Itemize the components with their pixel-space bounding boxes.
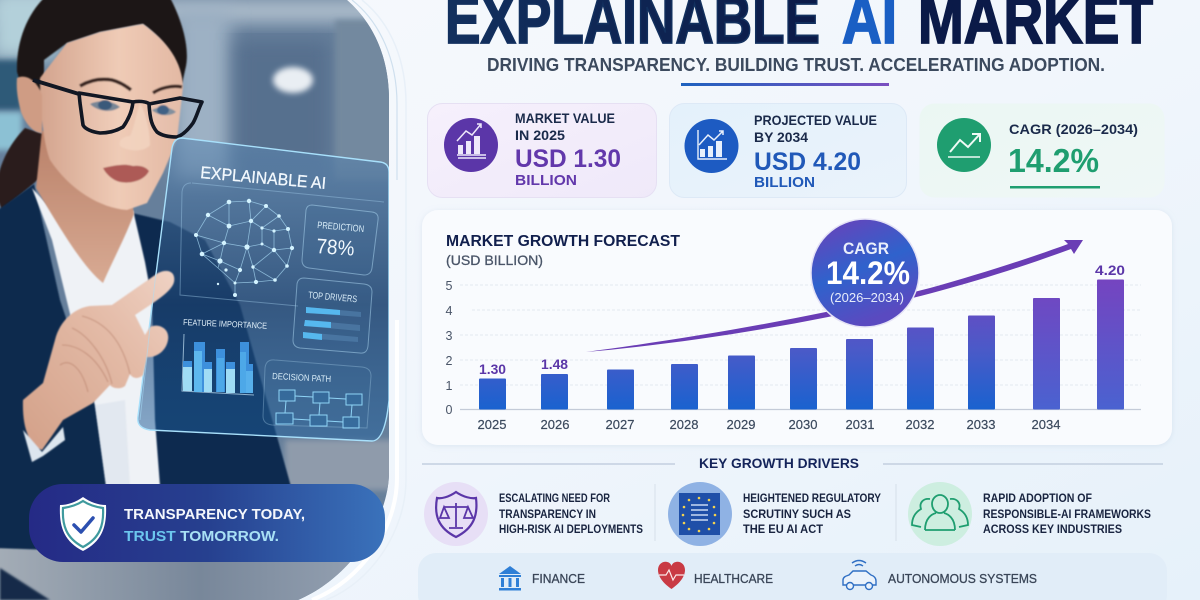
- icon: heart: [658, 562, 685, 589]
- driver: regulation: SCRUTINY SUCH AS: [743, 507, 851, 521]
- icon: blue bar chart: [684, 119, 738, 173]
- icon: EU flag: [668, 482, 732, 546]
- year labels: 2032: [906, 417, 934, 432]
- icon: green trend arrow: [937, 118, 991, 172]
- y axis and grid: 0: [446, 403, 453, 417]
- year labels: 2027: [606, 417, 634, 432]
- chart heading: [446, 233, 680, 268]
- icon: people: [908, 482, 972, 546]
- photo background: [0, 0, 405, 600]
- card: projected value by 2034: BILLION: [754, 174, 815, 191]
- icon: shield: [60, 497, 106, 551]
- icon: bank: [499, 566, 521, 590]
- driver: transparency: ESCALATING NEED FOR: [499, 491, 610, 505]
- top drivers box: TOP DRIVERS: [308, 290, 358, 305]
- panel: photo of woman with holographic dashboard: [0, 0, 406, 600]
- card: CAGR: 14.2%: [1008, 142, 1099, 179]
- card: projected value by 2034: USD 4.20: [754, 148, 861, 176]
- autonomous systems: AUTONOMOUS SYSTEMS: [888, 571, 1037, 586]
- driver: responsible AI: RAPID ADOPTION OF: [983, 491, 1092, 505]
- icon: connected car: [843, 560, 876, 590]
- panel heading: EXPLAINABLE AI: [200, 163, 327, 193]
- year labels: 2028: [670, 417, 698, 432]
- CAGR badge: (2026–2034): [830, 291, 904, 305]
- title: [445, 0, 1153, 58]
- driver: transparency: HIGH-RISK AI DEPLOYMENTS: [499, 522, 643, 536]
- card: CAGR: CAGR (2026–2034): [1009, 121, 1138, 137]
- autonomous systems: [843, 560, 1037, 590]
- growth arrow: [586, 240, 1083, 352]
- finance: [499, 566, 585, 590]
- ponytail: [0, 128, 46, 210]
- y axis and grid: 4: [446, 304, 453, 318]
- year labels: 2030: [789, 417, 817, 432]
- decision path box: DECISION PATH: [272, 371, 331, 384]
- finance: FINANCE: [532, 571, 585, 586]
- decision path box: [263, 360, 371, 428]
- healthcare: [658, 562, 773, 589]
- y axis and grid: [446, 279, 1141, 417]
- value labels: 4.20: [1095, 262, 1125, 278]
- value labels: 1.30: [479, 361, 506, 377]
- panel: market growth forecast chart: [422, 210, 1172, 445]
- glasses: [33, 80, 202, 137]
- y axis and grid: 3: [446, 329, 453, 343]
- tagline banner: [29, 484, 385, 562]
- feature importance chart: [182, 317, 267, 395]
- CAGR badge: 14.2%: [826, 255, 910, 291]
- tagline text: TRUST TOMORROW.: [124, 528, 279, 545]
- driver: responsible AI: ACROSS KEY INDUSTRIES: [983, 522, 1122, 536]
- card: market value in 2025: [428, 104, 656, 198]
- top drivers box: [293, 278, 372, 353]
- suit jacket: [0, 184, 292, 552]
- section: key growth drivers: KEY GROWTH DRIVERS: [699, 455, 859, 471]
- card: market value in 2025: USD 1.30: [515, 145, 621, 173]
- subtitle: DRIVING TRANSPARENCY. BUILDING TRUST. ACCELERATING ADOPTION.: [487, 55, 1105, 75]
- brain network: [194, 199, 294, 297]
- card: market value in 2025: IN 2025: [515, 127, 565, 143]
- year labels: 2026: [541, 417, 569, 432]
- section: key growth drivers: [422, 455, 1163, 546]
- card: projected value by 2034: [670, 104, 906, 198]
- hair: [16, 0, 188, 91]
- tagline text: [124, 506, 305, 545]
- neck: [36, 130, 134, 283]
- feature importance chart: FEATURE IMPORTANCE: [183, 317, 267, 331]
- CAGR badge: CAGR: [843, 239, 889, 258]
- driver: regulation: HEIGHTENED REGULATORY: [743, 491, 881, 505]
- prediction box: 78%: [316, 235, 355, 261]
- panel: industries strip: [418, 553, 1167, 600]
- hologram edge over hand: [140, 272, 156, 420]
- driver: responsible AI: [908, 482, 1151, 546]
- tagline text: TRANSPARENCY TODAY,: [124, 506, 305, 523]
- year labels: 2025: [478, 417, 506, 432]
- card: projected value by 2034: BY 2034: [754, 129, 808, 145]
- icon: purple bar chart: [444, 118, 498, 172]
- driver: transparency: [424, 482, 643, 546]
- white shirt: [32, 188, 160, 486]
- prediction box: PREDICTION: [317, 220, 365, 235]
- year labels: 2029: [727, 417, 755, 432]
- card: market value in 2025: BILLION: [515, 172, 577, 189]
- year labels: [478, 417, 1060, 432]
- y axis and grid: 5: [446, 279, 453, 293]
- chart heading: (USD BILLION): [446, 252, 543, 268]
- value labels: [479, 262, 1125, 377]
- driver: transparency: TRANSPARENCY IN: [499, 507, 596, 521]
- year labels: 2033: [967, 417, 995, 432]
- year labels: 2031: [846, 417, 874, 432]
- value labels: 1.48: [541, 356, 568, 372]
- hologram panel: [138, 138, 389, 441]
- icon: scales shield: [424, 482, 488, 546]
- prediction box: [302, 205, 378, 275]
- y axis and grid: 2: [446, 354, 453, 368]
- card: projected value by 2034: PROJECTED VALUE: [754, 112, 877, 128]
- healthcare: HEALTHCARE: [694, 571, 773, 586]
- card: CAGR: [920, 104, 1164, 198]
- driver: regulation: THE EU AI ACT: [743, 522, 824, 536]
- year labels: 2034: [1032, 417, 1060, 432]
- driver: regulation: [668, 482, 881, 546]
- face: [17, 24, 183, 210]
- y axis and grid: 1: [446, 379, 453, 393]
- bars: [479, 280, 1124, 410]
- driver: responsible AI: RESPONSIBLE-AI FRAMEWORKS: [983, 507, 1151, 521]
- hand: [23, 271, 174, 462]
- card: market value in 2025: MARKET VALUE: [515, 110, 615, 126]
- CAGR badge: [811, 219, 919, 327]
- chart heading: MARKET GROWTH FORECAST: [446, 233, 680, 250]
